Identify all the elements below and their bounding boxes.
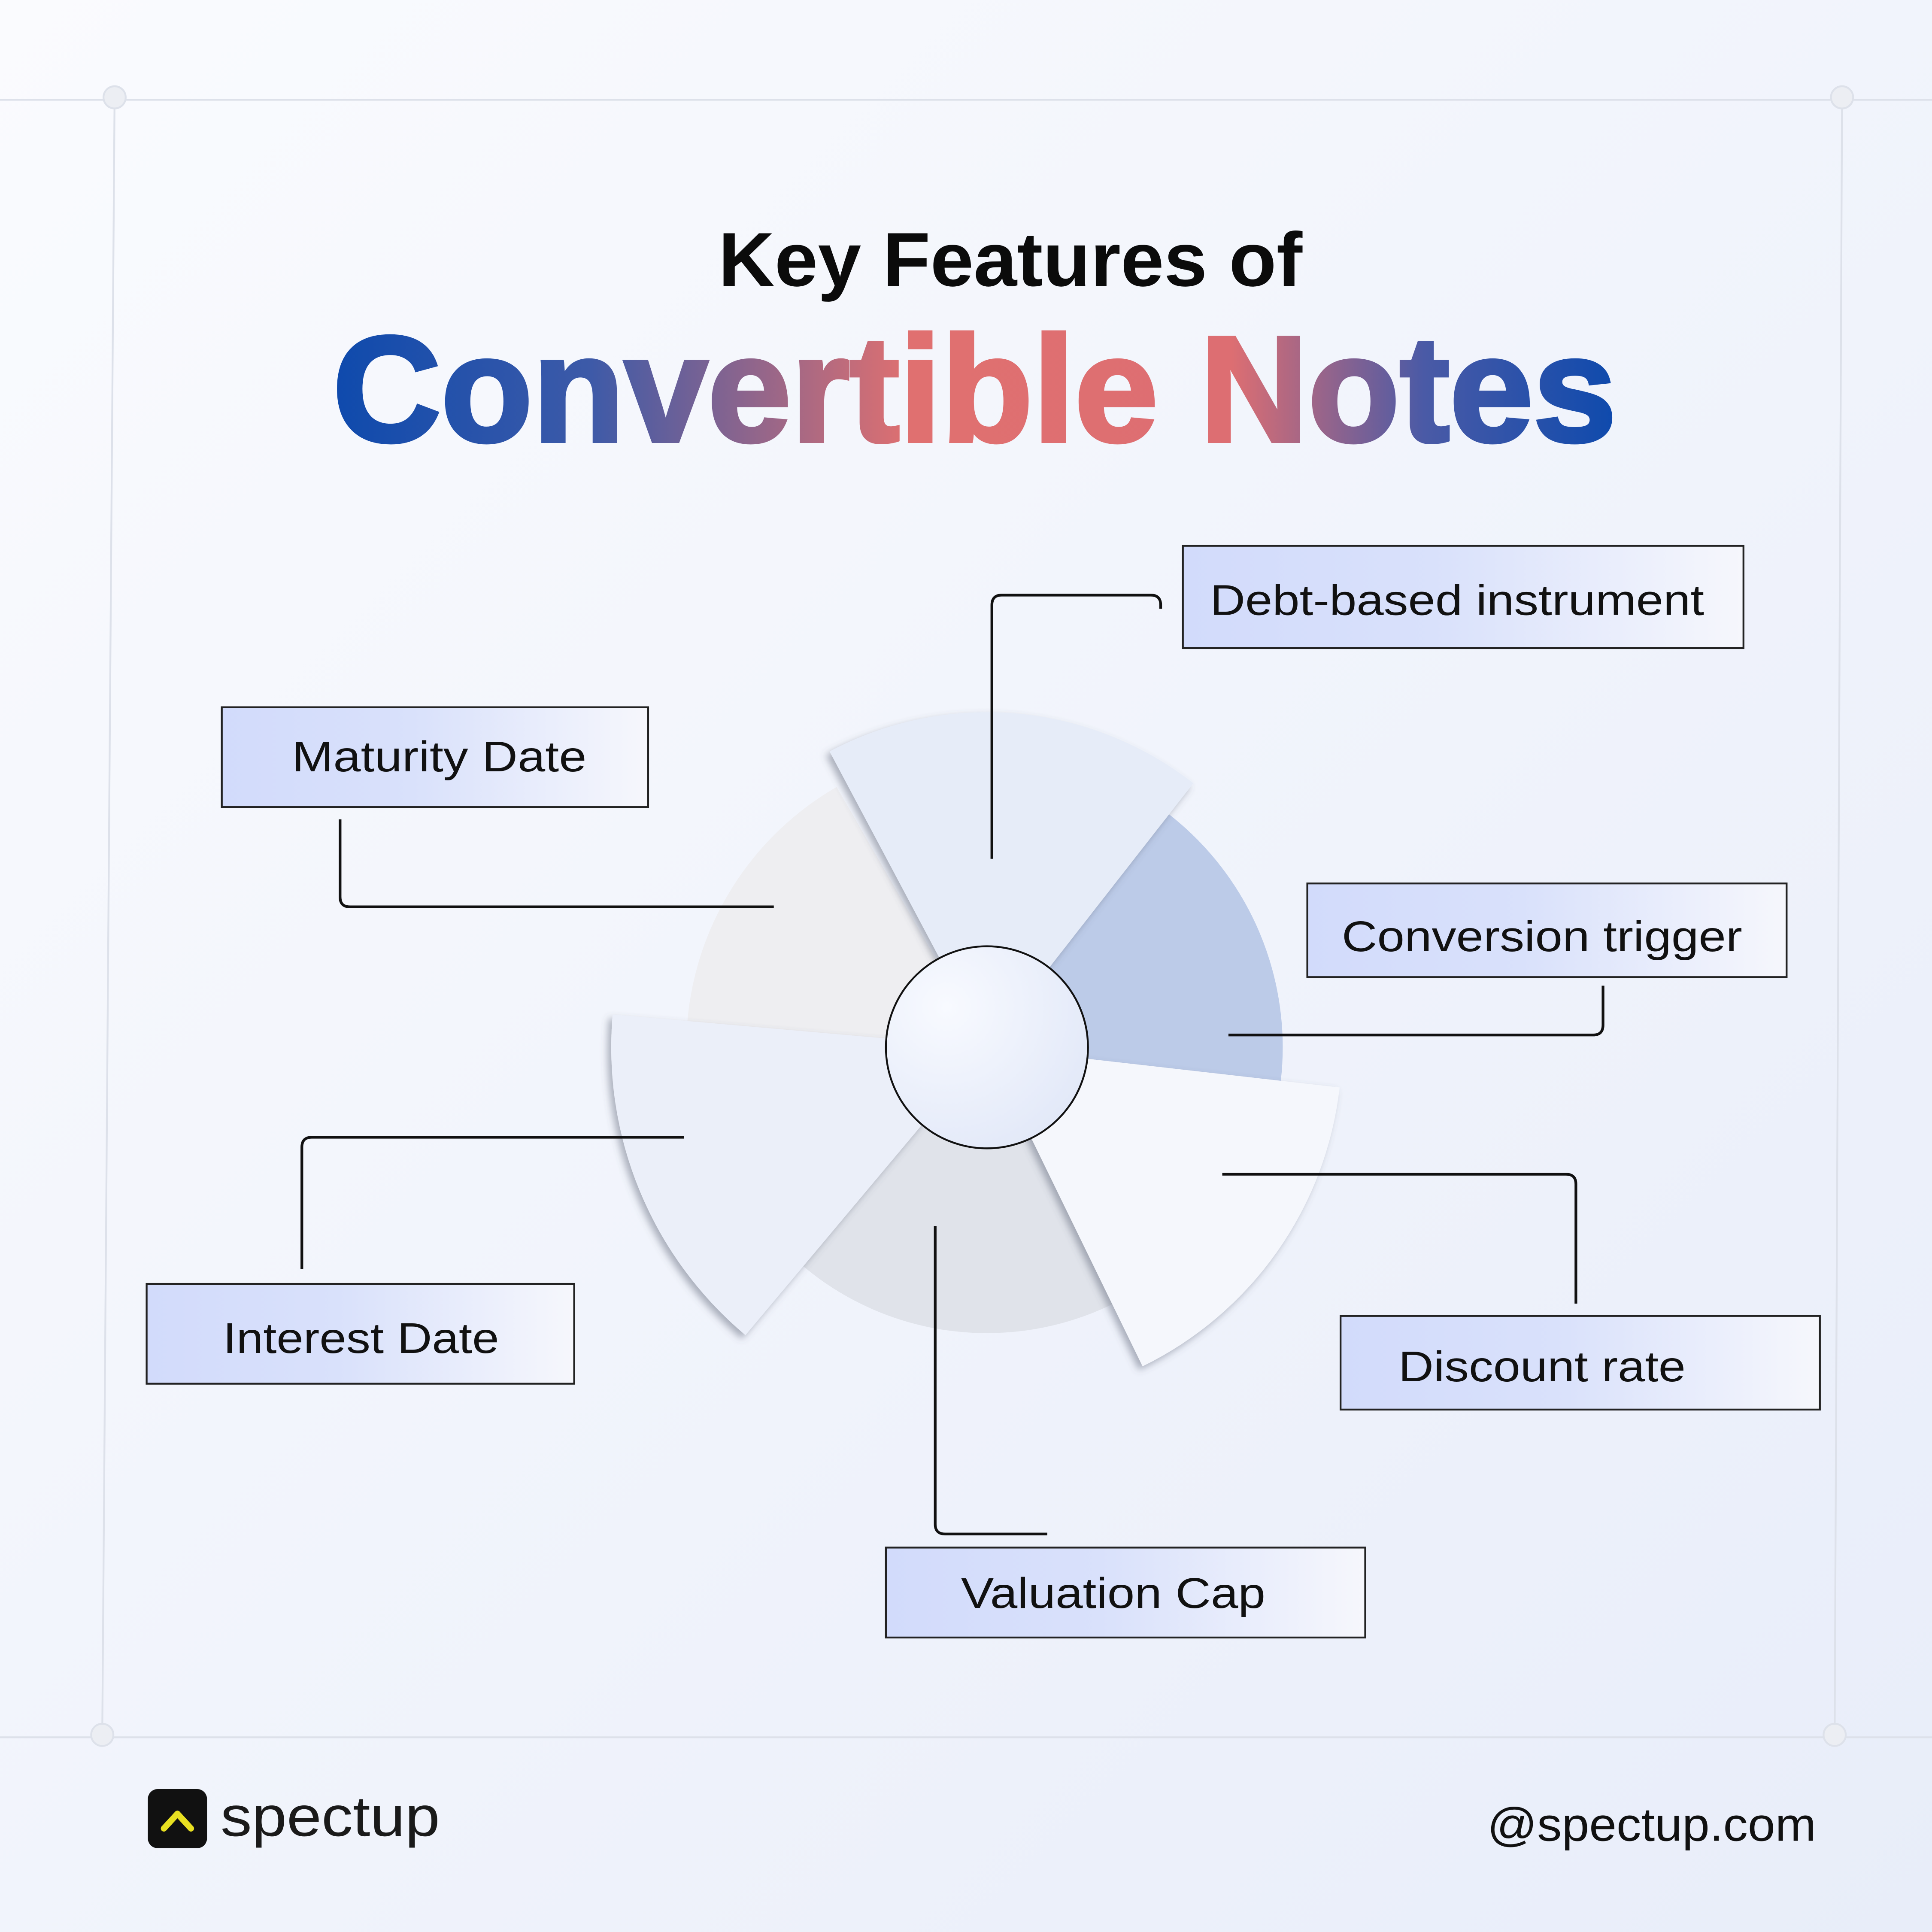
pie chart	[611, 712, 1340, 1366]
label: debt-based instrument	[1183, 546, 1744, 648]
label: maturity date	[222, 707, 648, 807]
sector: conversion trigger	[987, 814, 1283, 1081]
logo: spectup	[221, 1784, 440, 1848]
label: valuation cap	[886, 1547, 1365, 1638]
label: interest date	[147, 1284, 574, 1384]
handle: @spectup.com	[1487, 1799, 1816, 1851]
logo	[148, 1784, 440, 1848]
sector: discount	[987, 1047, 1340, 1366]
center circle	[886, 946, 1088, 1148]
label: interest date: Interest Date	[223, 1314, 499, 1362]
label: maturity date: Maturity Date	[292, 733, 586, 781]
label: debt-based instrument: Debt-based instrument	[1210, 576, 1704, 624]
connectors	[302, 595, 1603, 1534]
title	[333, 217, 1617, 473]
sector: debt-based	[830, 712, 1193, 1047]
sector: valuation cap	[803, 1047, 1112, 1333]
sector: interest	[611, 1015, 987, 1335]
title: Convertible Notes	[333, 306, 1617, 473]
label: discount rate: Discount rate	[1398, 1343, 1686, 1391]
label: conversion trigger	[1307, 883, 1786, 977]
label: valuation cap: Valuation Cap	[961, 1569, 1265, 1617]
label: conversion trigger: Conversion trigger	[1342, 913, 1742, 961]
sector: maturity	[687, 787, 987, 1047]
label: discount rate	[1341, 1316, 1820, 1410]
title: Key Features of	[719, 217, 1303, 302]
